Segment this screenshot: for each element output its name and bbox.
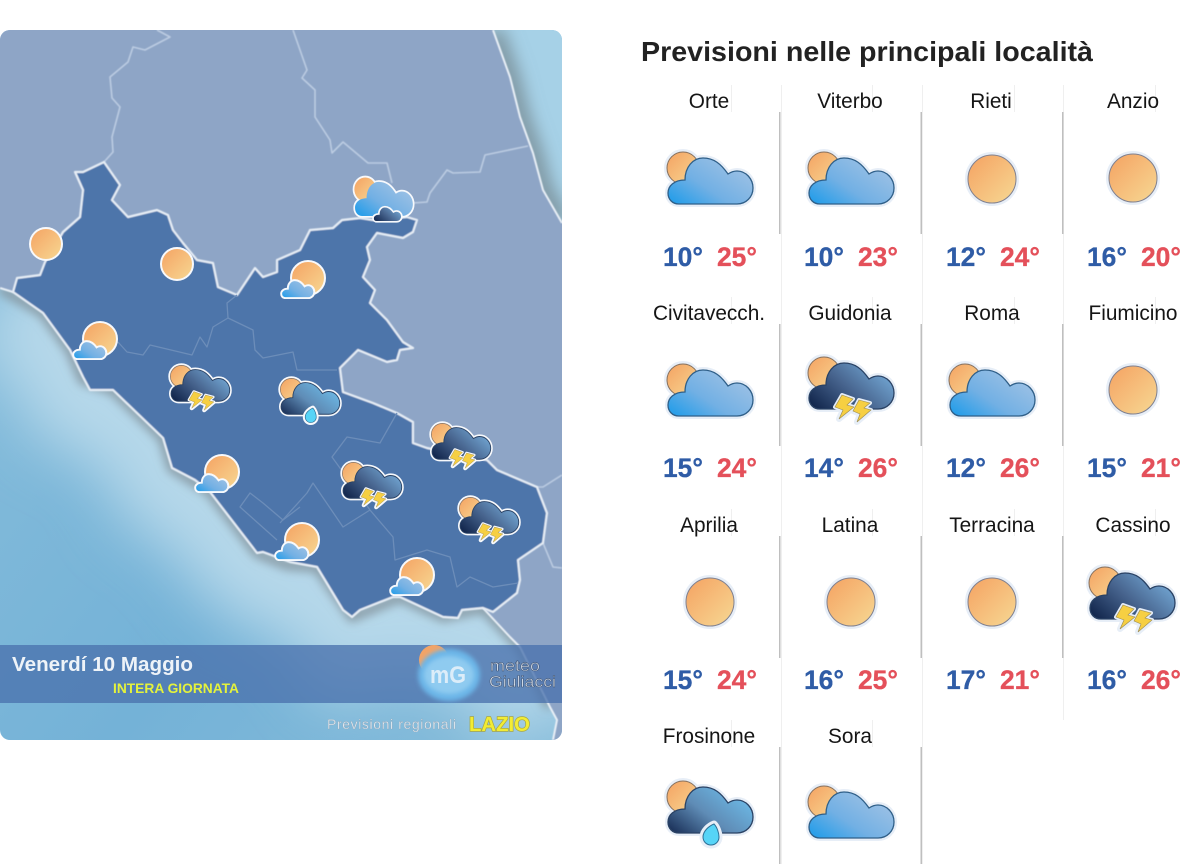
city: Latina: Latina — [822, 514, 879, 537]
city: Terracina: Terracina — [949, 514, 1035, 537]
icon: sun 1 — [30, 228, 62, 260]
logo: meteo Giuliacci — [418, 645, 556, 701]
city: Rieti: 24° — [1000, 242, 1040, 272]
city: Sora: Sora — [828, 725, 872, 748]
city: Aprilia: 15° — [663, 665, 703, 695]
icon: sun 2 — [161, 248, 193, 280]
city: Guidonia: 26° — [858, 453, 898, 483]
city: Terracina: 17° — [946, 665, 986, 695]
date label: Venerdí 10 Maggio — [12, 654, 193, 676]
icon: partly cloudy, Gaeta — [390, 558, 434, 595]
city: Fiumicino: Fiumicino — [1088, 302, 1178, 325]
icon: storm, centre — [342, 462, 402, 507]
city: Latina: 25° — [858, 665, 898, 695]
city: Anzio — [1087, 90, 1181, 272]
city: Latina: 16° — [804, 665, 844, 695]
city: Fiumicino: 15° — [1087, 453, 1127, 483]
city: Civitavecchia: Civitavecch. — [653, 302, 765, 325]
city: Viterbo: Viterbo — [817, 90, 883, 113]
right sea — [494, 30, 562, 222]
title band — [0, 645, 562, 703]
heading: Previsioni nelle principali località — [641, 36, 1094, 67]
city: Cassino: Cassino — [1095, 514, 1171, 537]
city: Civitavecchia — [653, 302, 765, 483]
city: Roma: 12° — [946, 453, 986, 483]
coast shadow — [0, 288, 550, 707]
icon: storm, Frosinone north — [431, 423, 491, 468]
city: Aprilia: Aprilia — [680, 514, 738, 537]
city: Roma: 26° — [1000, 453, 1040, 483]
city: Guidonia — [804, 302, 898, 483]
region name: LAZIO — [469, 713, 530, 736]
city: Orte: 25° — [717, 242, 757, 272]
city: Roma: Roma — [964, 302, 1020, 325]
city: Cassino: 16° — [1087, 665, 1127, 695]
map icons — [30, 177, 519, 595]
sea background — [0, 30, 562, 740]
logo: meteo Giuliacci: Giuliacci — [489, 674, 556, 691]
icon: partly cloudy, Rome coast — [195, 455, 239, 492]
icon: rain, Rome east — [280, 378, 340, 423]
panel: Lazio weather map — [0, 30, 562, 740]
city: Rieti: 12° — [946, 242, 986, 272]
period label: INTERA GIORNATA — [113, 680, 239, 696]
logo: meteo Giuliacci: mG — [430, 662, 466, 689]
city: Sora — [808, 725, 894, 838]
city: Orte: Orte — [689, 90, 729, 113]
city: Anzio: 16° — [1087, 242, 1127, 272]
icon: partly cloudy, Civitavecchia — [73, 322, 117, 359]
regional borders — [104, 30, 562, 568]
city: Viterbo — [804, 90, 898, 272]
icon: storm, north Rome — [170, 365, 230, 410]
city: Fiumicino — [1087, 302, 1181, 483]
city: Anzio: Anzio — [1107, 90, 1159, 113]
neighbouring regions — [0, 30, 562, 740]
coast lines — [0, 30, 562, 740]
city: Viterbo: 23° — [858, 242, 898, 272]
city: Frosinone: Frosinone — [663, 725, 755, 748]
city: Viterbo: 10° — [804, 242, 844, 272]
city: Guidonia: Guidonia — [808, 302, 892, 325]
Lazio region — [13, 162, 547, 618]
city: Rieti — [946, 90, 1040, 272]
city: Orte: 10° — [663, 242, 703, 272]
forecast grid — [653, 90, 1181, 845]
city: Roma — [946, 302, 1040, 483]
coast glow — [0, 300, 550, 719]
icon: partly cloudy, Latina — [275, 523, 319, 560]
city: Rieti: Rieti — [970, 90, 1012, 113]
city: Cassino — [1087, 514, 1181, 695]
city: Fiumicino: 21° — [1141, 453, 1181, 483]
city: Guidonia: 14° — [804, 453, 844, 483]
city: Aprilia: 24° — [717, 665, 757, 695]
icon: storm, east — [459, 497, 519, 542]
provincial borders — [118, 295, 518, 587]
icon: partly cloudy, north — [354, 177, 413, 222]
city: Anzio: 20° — [1141, 242, 1181, 272]
city: Orte — [663, 90, 757, 272]
city: Cassino: 26° — [1141, 665, 1181, 695]
city: Civitavecchia: 24° — [717, 453, 757, 483]
city: Civitavecchia: 15° — [663, 453, 703, 483]
logo: meteo Giuliacci: meteo — [490, 658, 540, 675]
city: Aprilia — [663, 514, 757, 695]
right coast shadow — [493, 30, 562, 223]
city: Terracina — [946, 514, 1040, 695]
city: Terracina: 21° — [1000, 665, 1040, 695]
regional forecast label: Previsioni regionali — [327, 716, 456, 732]
city: Latina — [804, 514, 898, 695]
city: Frosinone — [663, 725, 755, 845]
icon: partly cloudy, Rieti area — [281, 261, 325, 298]
